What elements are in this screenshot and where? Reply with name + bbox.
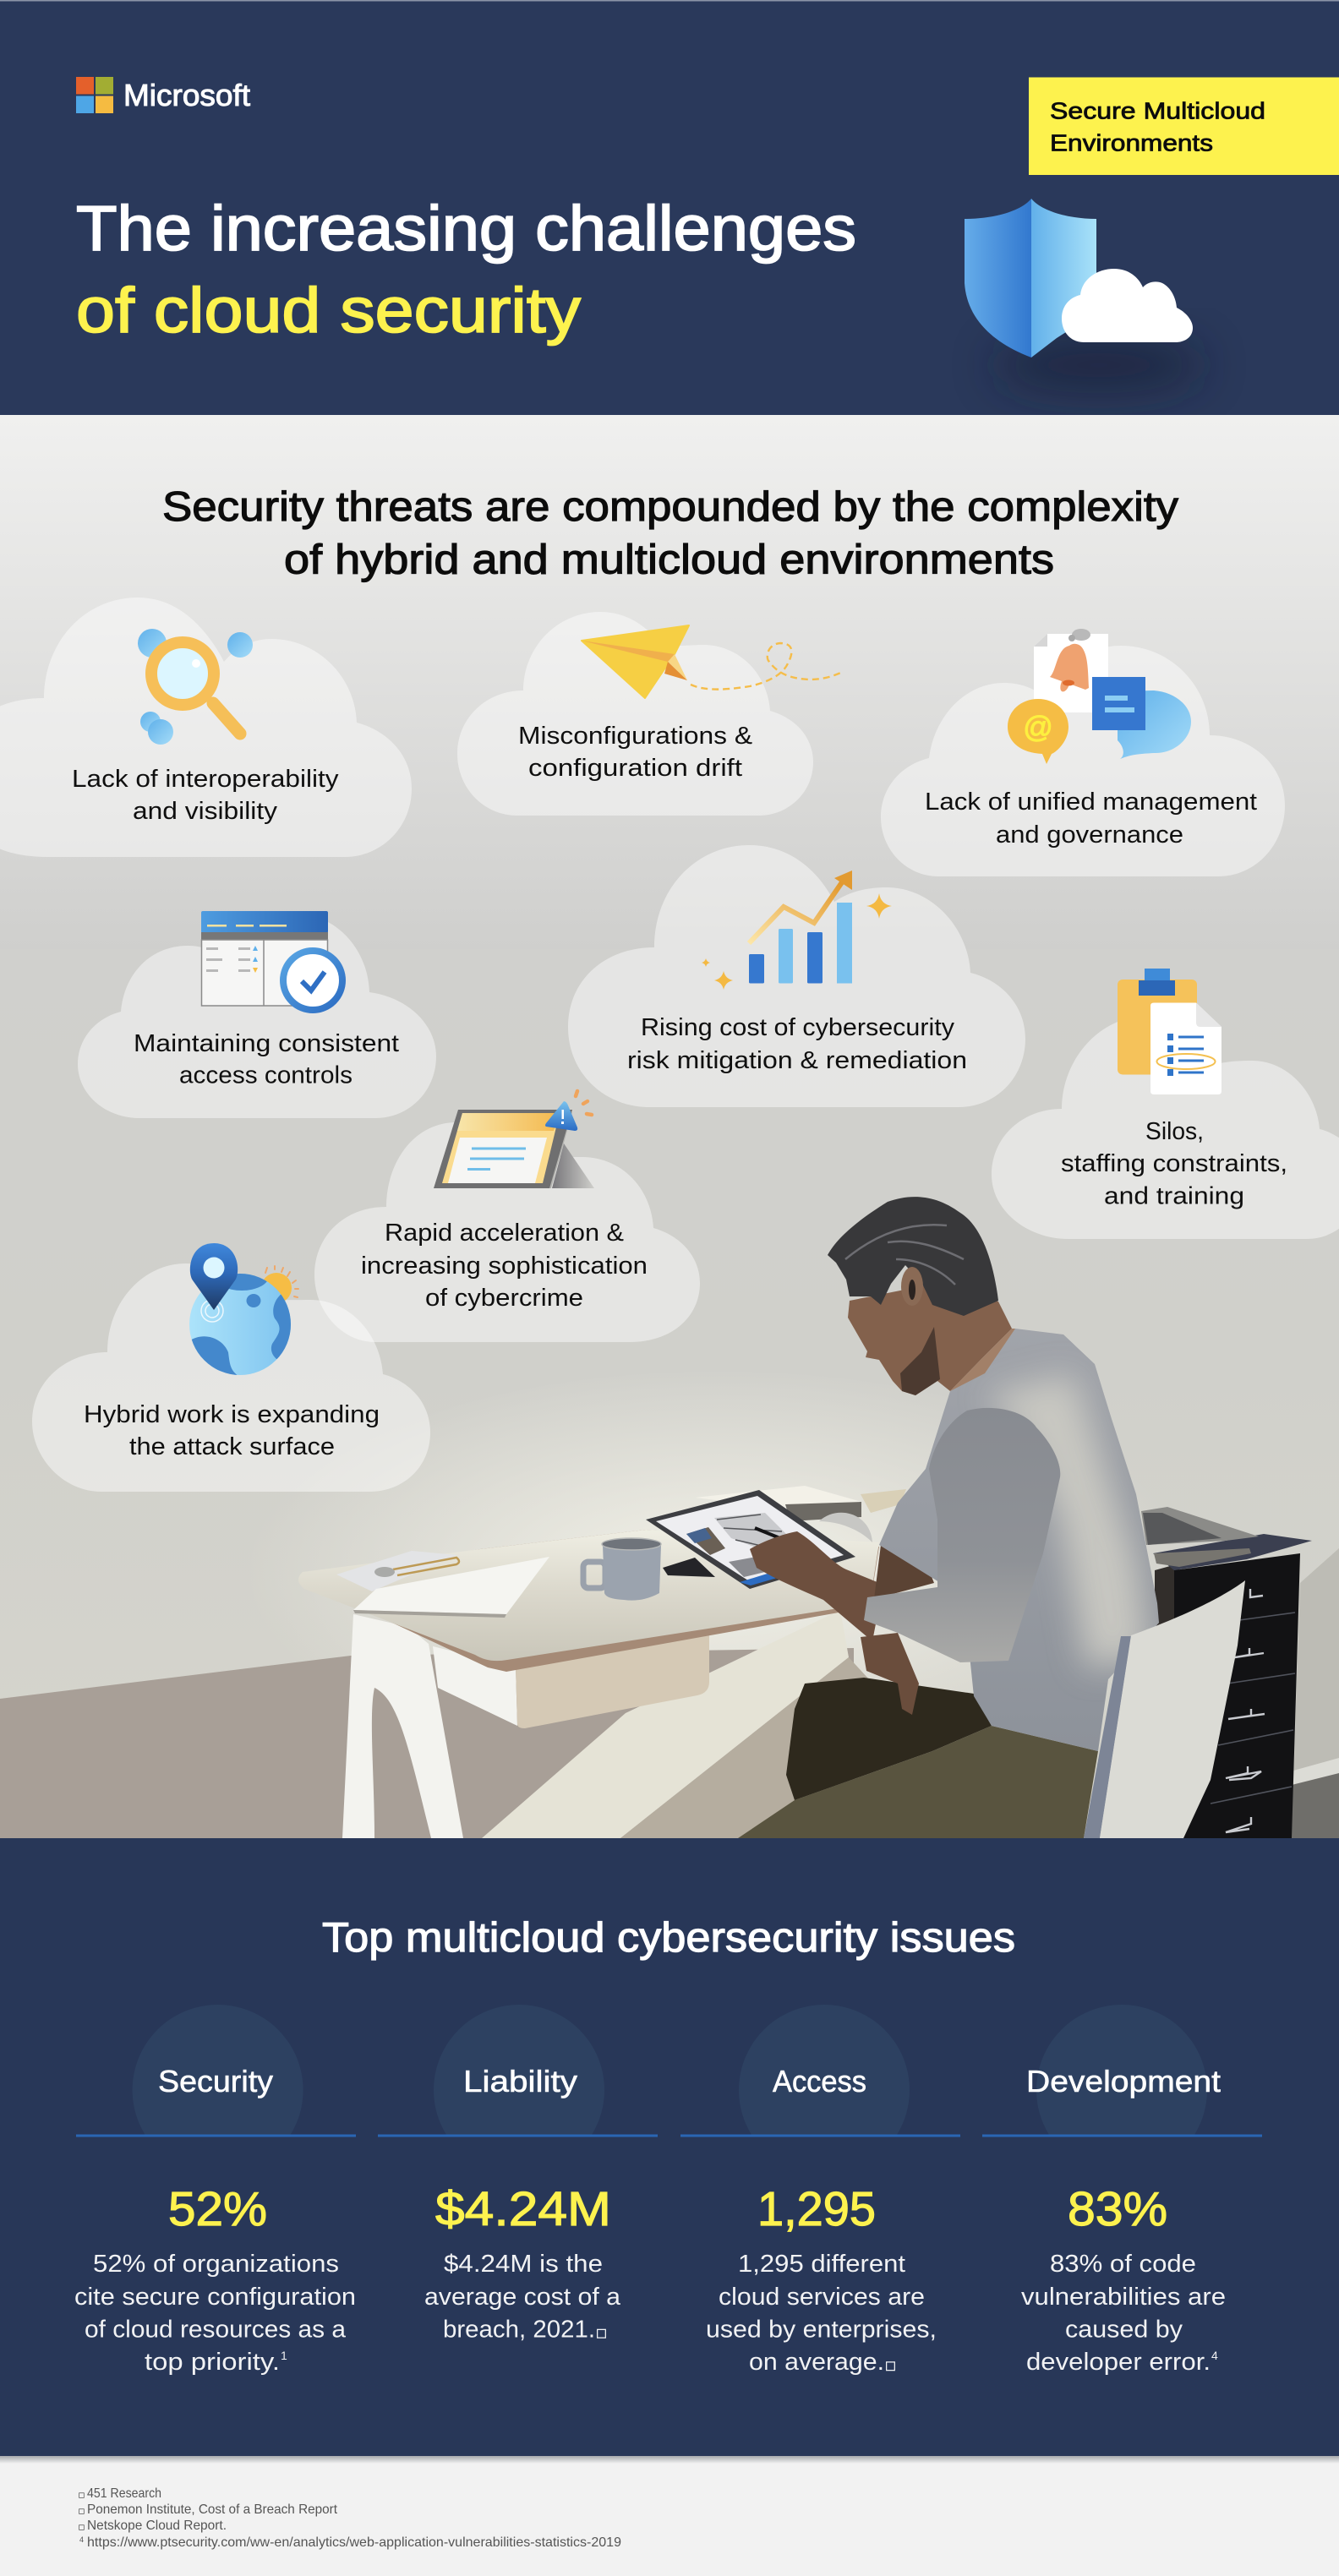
text: the attack surface — [129, 1433, 335, 1460]
panel: rising cost — [568, 845, 1025, 1107]
footer: sources: https://www.ptsecurity.com/ww-en/analytics/web-application-vulnerabilities-statistics-2019 — [87, 2535, 621, 2550]
panel: hybrid work — [32, 1243, 430, 1492]
column: access: cloud services are — [719, 2284, 925, 2311]
icon: dashboard window with check — [201, 911, 342, 1010]
heading: security threats: of hybrid and multicloud environments — [284, 538, 1054, 583]
heading: security threats — [162, 484, 1179, 583]
text: Lack of unified management — [925, 789, 1257, 816]
column: development: 4 — [1211, 2349, 1218, 2362]
text — [72, 766, 339, 825]
title: of cloud security — [76, 275, 582, 346]
text — [361, 1220, 648, 1312]
icon: globe with pin and sun — [186, 1243, 298, 1379]
footer: sources: ▫ — [78, 2521, 85, 2534]
tag: Secure Multicloud Environments: Environments — [1050, 130, 1213, 156]
text: Misconfigurations & — [518, 723, 752, 750]
title — [76, 193, 856, 346]
Microsoft logo: Microsoft — [123, 78, 250, 112]
column: security: cite secure configuration — [74, 2284, 356, 2311]
text: Rising cost of cybersecurity — [641, 1014, 955, 1041]
wall shadow and floor right — [1288, 1548, 1339, 1838]
hand on tablet — [750, 1531, 883, 1641]
tablet — [646, 1490, 855, 1589]
column: development — [982, 2005, 1262, 2376]
column: access: on average. — [749, 2349, 884, 2376]
column: access: used by enterprises, — [706, 2316, 937, 2343]
panel: silos — [992, 969, 1339, 1239]
panel: rapid acceleration — [314, 1091, 700, 1342]
panel: lack of interoperability — [0, 598, 412, 857]
text: Silos, — [1145, 1118, 1204, 1145]
column: development: caused by — [1065, 2316, 1183, 2343]
text — [1061, 1118, 1287, 1210]
filing cabinet — [1124, 1553, 1300, 1838]
text: and training — [1104, 1183, 1244, 1210]
column: security: 52% of organizations — [93, 2251, 339, 2278]
icon: tablet with warning — [434, 1091, 594, 1188]
photo: person working at desk with tablet — [0, 1197, 1339, 1838]
icon: rising bar chart — [702, 870, 892, 990]
column: access: 1,295 different — [738, 2251, 905, 2278]
forearm and lower hand — [861, 1545, 934, 1715]
tag: Secure Multicloud Environments — [1029, 78, 1339, 175]
column: liability: Liability — [463, 2064, 577, 2098]
mug — [583, 1538, 661, 1601]
column: liability: ▫ — [595, 2322, 608, 2344]
text: staffing constraints, — [1061, 1150, 1287, 1177]
text: access controls — [179, 1062, 353, 1089]
text: and visibility — [133, 798, 278, 825]
panel: misconfigurations — [457, 612, 843, 816]
lit diagonal band — [482, 1610, 849, 1838]
text: risk mitigation & remediation — [627, 1047, 967, 1074]
footer: sources — [0, 2456, 1339, 2576]
text: of cybercrime — [425, 1285, 583, 1312]
text: Rapid acceleration & — [385, 1220, 624, 1247]
icon: notifications and chat: @ — [1023, 711, 1053, 744]
column: liability — [378, 2005, 658, 2344]
text — [627, 1014, 967, 1074]
text: and governance — [996, 821, 1183, 849]
column: security: 1 — [281, 2349, 287, 2362]
panel: top multicloud issues — [0, 1838, 1339, 2456]
column: security: Security — [158, 2064, 273, 2098]
icon: notifications and chat — [1008, 629, 1191, 764]
footer: sources: 451 Research — [87, 2486, 161, 2501]
items: notebook, keys — [336, 1551, 549, 1618]
column: access: 1,295 — [757, 2182, 876, 2236]
column: security: top priority. — [145, 2349, 280, 2376]
mouse — [819, 1513, 872, 1542]
column: development: Development — [1026, 2064, 1221, 2098]
footer: sources: Ponemon Institute, Cost of a Breach Report — [87, 2502, 338, 2517]
pants — [738, 1678, 1098, 1838]
desk — [298, 1530, 879, 1838]
head: face, ear, hair — [828, 1197, 1015, 1395]
bowl and papers behind tablet — [695, 1486, 906, 1521]
sweater sleeve — [864, 1408, 1060, 1662]
column: development: 83% — [1068, 2182, 1167, 2236]
text: increasing sophistication — [361, 1253, 648, 1280]
text: configuration drift — [528, 755, 742, 782]
icon: shield with cloud — [965, 199, 1205, 394]
footer: sources: 4 — [79, 2535, 84, 2544]
column: development: developer error. — [1026, 2349, 1211, 2376]
sweater body — [879, 1329, 1159, 1751]
text — [84, 1401, 380, 1460]
column: liability: average cost of a — [424, 2284, 621, 2311]
text — [925, 789, 1257, 849]
column: liability: breach, 2021. — [443, 2316, 595, 2343]
panel: threats background and photo wall — [0, 415, 1339, 1838]
text: Hybrid work is expanding — [84, 1401, 380, 1428]
column: security: of cloud resources as a — [85, 2316, 347, 2343]
column: security — [74, 2005, 356, 2376]
laptop and folder on cabinet — [1141, 1507, 1312, 1570]
text: Lack of interoperability — [72, 766, 339, 793]
panel: unified management — [881, 629, 1285, 876]
column: access: ▫ — [884, 2355, 897, 2377]
wall shadow under desk — [0, 1648, 854, 1838]
heading: Top multicloud cybersecurity issues — [322, 1915, 1015, 1961]
column: liability: $4.24M — [435, 2182, 611, 2236]
column: liability: $4.24M is the — [444, 2251, 603, 2278]
icon: paper plane — [582, 625, 843, 698]
column: access: Access — [773, 2064, 866, 2098]
Microsoft logo — [76, 77, 250, 113]
footer: sources: Netskope Cloud Report. — [87, 2519, 227, 2533]
header band — [0, 0, 1339, 415]
column: development: vulnerabilities are — [1021, 2284, 1226, 2311]
text — [134, 1030, 399, 1089]
footer: sources: ▫ — [78, 2505, 85, 2518]
footer: sources: ▫ — [78, 2489, 85, 2502]
tag: Secure Multicloud Environments: Secure Multicloud — [1050, 98, 1265, 123]
panel: access controls — [78, 911, 436, 1118]
column: development: 83% of code — [1050, 2251, 1196, 2278]
icon: magnifier and bubbles — [138, 629, 253, 745]
column: security: 52% — [168, 2182, 267, 2236]
text: Maintaining consistent — [134, 1030, 399, 1057]
text — [518, 723, 752, 782]
heading: security threats: Security threats are compounded by the complexity — [162, 484, 1179, 530]
chair — [1084, 1580, 1245, 1838]
column: access — [680, 2005, 960, 2377]
icon: clipboard and checklist — [1118, 969, 1221, 1094]
title: The increasing challenges — [76, 193, 856, 264]
